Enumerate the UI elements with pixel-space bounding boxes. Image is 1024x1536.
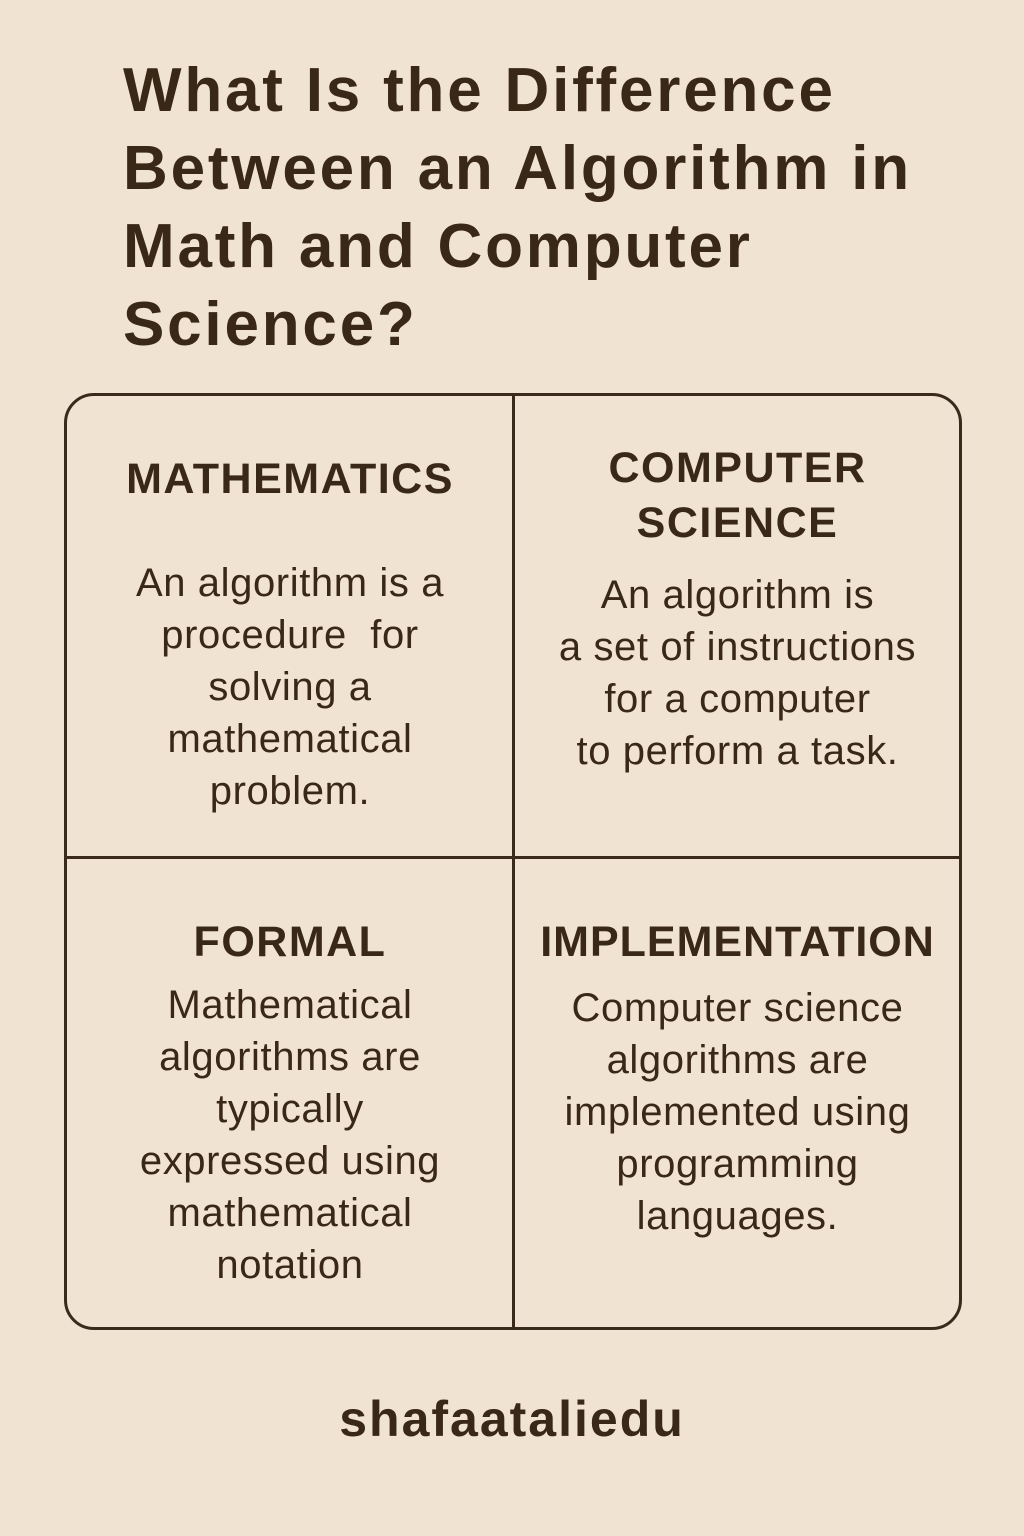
heading: computer science: COMPUTER — [608, 444, 867, 492]
text: computer science definition — [559, 573, 916, 773]
title: Between an Algorithm in — [123, 134, 912, 203]
text: implementation description: programming — [616, 1142, 859, 1186]
title — [123, 56, 912, 359]
heading: formal: FORMAL — [194, 918, 386, 966]
text: computer science definition: for a computer — [604, 677, 871, 721]
panel: mathematics — [126, 455, 454, 813]
heading: implementation: IMPLEMENTATION — [540, 918, 935, 966]
text: computer science definition: to perform a task. — [576, 729, 899, 773]
title: What Is the Difference — [123, 56, 836, 125]
text: formal description: algorithms are — [159, 1035, 421, 1079]
panel: computer science — [559, 444, 916, 773]
text: mathematics definition: mathematical — [167, 717, 413, 761]
text: mathematics definition: problem. — [210, 769, 370, 813]
heading: mathematics: MATHEMATICS — [126, 455, 454, 503]
text: implementation description: languages. — [637, 1194, 838, 1238]
panel: implementation — [540, 918, 935, 1238]
title: Science? — [123, 290, 418, 359]
text: implementation description: implemented using — [565, 1090, 910, 1134]
text: formal description: Mathematical — [167, 983, 413, 1027]
text: implementation description: algorithms are — [607, 1038, 868, 1082]
footer: brand: shafaataliedu — [339, 1391, 685, 1447]
text: formal description: typically — [216, 1087, 364, 1131]
title: Math and Computer — [123, 212, 753, 281]
text: mathematics definition: An algorithm is a — [136, 561, 444, 605]
heading: computer science — [608, 444, 867, 547]
text: formal description: expressed using — [140, 1139, 440, 1183]
text: implementation description: Computer science — [572, 986, 903, 1030]
text: formal description: notation — [216, 1243, 364, 1287]
comparison grid — [64, 393, 962, 1330]
text: computer science definition: a set of instructions — [559, 625, 916, 669]
text: formal description: mathematical — [167, 1191, 413, 1235]
heading: computer science: SCIENCE — [637, 499, 838, 547]
panel: formal — [140, 918, 440, 1287]
text: implementation description — [565, 986, 910, 1238]
text: formal description — [140, 983, 440, 1287]
text: mathematics definition: solving a — [208, 665, 372, 709]
text: mathematics definition — [136, 561, 444, 813]
text: computer science definition: An algorithm is — [601, 573, 874, 617]
text: mathematics definition: procedure for — [161, 613, 419, 657]
